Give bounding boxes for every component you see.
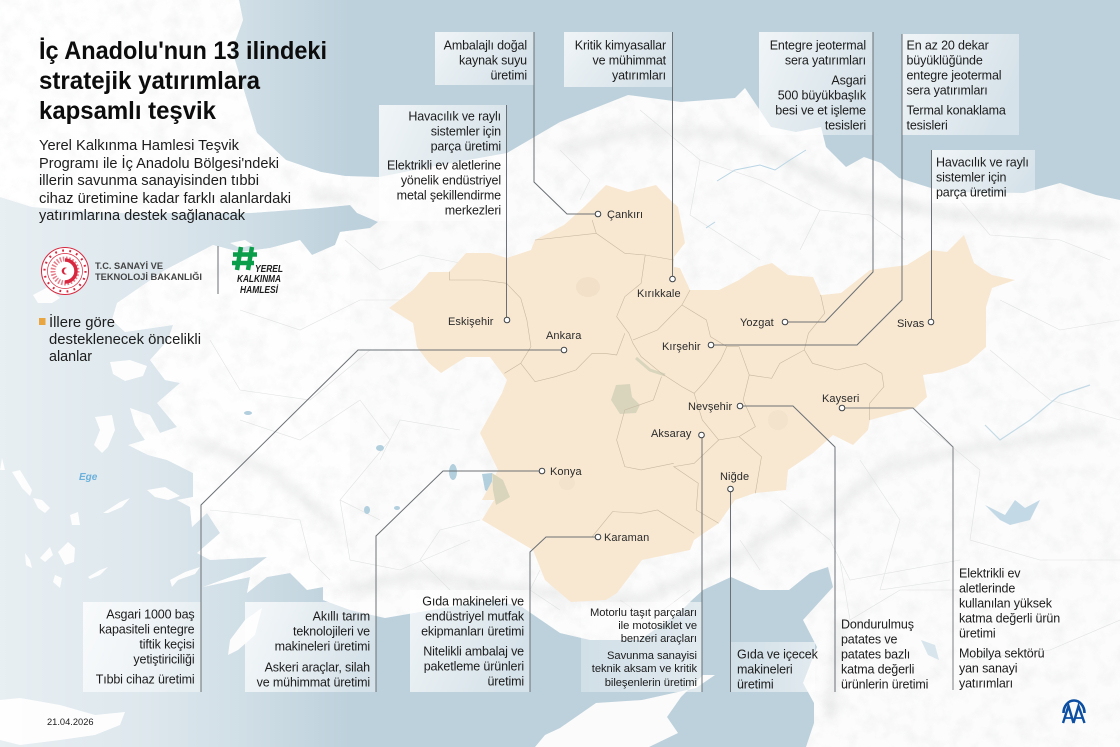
intro text: Programı ile İç Anadolu Bölgesi'ndeki — [39, 154, 279, 172]
city markers and labels: Karaman — [604, 532, 649, 544]
legend: İllere göre — [49, 313, 115, 331]
panel: Kayseri: üretimi — [959, 626, 996, 640]
province borders outside region — [210, 110, 1120, 660]
panel: Nevşehir — [841, 618, 928, 692]
city markers and labels: Yozgat — [740, 317, 774, 329]
city markers and labels: Çankırı — [607, 209, 643, 221]
panel: Yozgat: 500 büyükbaşlık — [778, 88, 867, 102]
left wash — [0, 0, 350, 747]
panel: Konya: ve mühimmat üretimi — [257, 676, 370, 690]
panel: Niğde — [737, 648, 819, 692]
city markers and labels: Ankara — [546, 330, 582, 342]
panel: Yozgat: Asgari — [831, 74, 866, 88]
lakes inside region — [611, 384, 640, 414]
city markers and labels: Sivas — [897, 318, 925, 330]
panel: Yozgat — [770, 38, 867, 132]
city markers and labels: Konya — [550, 466, 582, 478]
panel: Karaman — [421, 594, 525, 688]
left land re-lightening — [282, 163, 350, 602]
logo: T.C. Sanayi ve Teknoloji Bakanlığı: T.C. SANAYİ VE — [95, 261, 163, 272]
panel: Yozgat: tesisleri — [825, 118, 866, 132]
panel: Nevşehir: patates ve — [841, 632, 897, 646]
panel: Ankara — [96, 608, 195, 686]
panel: Sivas: sistemler için — [936, 170, 1006, 184]
panel: Aksaray: Savunma sanayisi — [607, 650, 697, 662]
intro text: yatırımlarına destek sağlanacak — [39, 208, 246, 224]
intro text: cihaz üretimine kadar farklı alanlardaki — [39, 191, 291, 207]
panel: Nevşehir: patates bazlı — [841, 648, 910, 662]
city markers and labels: Aksaray — [651, 428, 692, 440]
panel: Niğde: makineleri — [737, 662, 793, 676]
region: Central Anatolia provinces — [389, 185, 1015, 602]
legend: desteklenecek öncelikli — [49, 332, 201, 348]
lakes and rivers — [244, 150, 1090, 660]
panel: Eskişehir: metal şekillendirme — [397, 188, 501, 202]
panel: Ankara: Asgari 1000 baş — [106, 608, 194, 622]
logo: Yerel Kalkınma Hamlesi: HAMLESİ — [240, 283, 279, 296]
title — [39, 37, 327, 125]
leader lines — [201, 32, 953, 692]
panel: Niğde: üretimi — [737, 678, 774, 692]
panel: Kayseri: Elektrikli ev — [959, 566, 1021, 580]
intro text: Yerel Kalkınma Hamlesi Teşvik — [39, 138, 240, 154]
panel: Ankara: kapasiteli entegre — [99, 622, 195, 636]
panel: Kayseri: katma değerli ürün — [959, 612, 1060, 626]
panel: Yozgat: Entegre jeotermal — [770, 38, 866, 52]
panel: Kırşehir: entegre jeotermal — [906, 68, 1001, 82]
panel: Çankırı: üretimi — [490, 68, 527, 82]
panel: Sivas — [936, 156, 1029, 200]
panel: Karaman: üretimi — [487, 674, 524, 688]
panel: Aksaray: Motorlu taşıt parçaları — [590, 607, 697, 619]
panel: Karaman: endüstriyel mutfak — [425, 610, 525, 624]
panel: Kırşehir: tesisleri — [906, 118, 948, 132]
panel: Konya: makineleri üretimi — [275, 640, 370, 654]
title: İç Anadolu'nun 13 ilindeki — [39, 37, 327, 65]
panel: Karaman: paketleme ürünleri — [424, 660, 524, 674]
panel: Eskişehir: Havacılık ve raylı — [408, 110, 501, 124]
panel: Kırşehir: En az 20 dekar — [906, 38, 989, 52]
panel: Kırşehir: büyüklüğünde — [906, 54, 983, 68]
logo: Yerel Kalkınma Hamlesi — [232, 247, 283, 296]
panel: Niğde: Gıda ve içecek — [737, 648, 819, 662]
panel: Sivas: parça üretimi — [936, 186, 1006, 200]
panel: Yozgat: besi ve et işleme — [775, 104, 866, 118]
logo: Yerel Kalkınma Hamlesi: KALKINMA — [237, 273, 281, 285]
panel: Konya: Akıllı tarım — [313, 610, 370, 624]
panel: Eskişehir: merkezleri — [445, 204, 501, 218]
legend: alanlar — [49, 349, 92, 365]
panels backgrounds — [83, 32, 1035, 692]
panel: Kırşehir — [906, 38, 1006, 132]
panel: Çankırı — [444, 38, 527, 82]
panel: Nevşehir: ürünlerin üretimi — [841, 678, 928, 692]
panel: Kayseri: Mobilya sektörü — [959, 646, 1045, 660]
panel: Yozgat: sera yatırımları — [785, 54, 866, 68]
panel: Kırıkkale — [575, 38, 667, 82]
icon: AA logo — [1063, 700, 1084, 723]
panel: Aksaray: benzeri araçları — [621, 633, 697, 645]
date: 21.04.2026 — [47, 717, 94, 727]
panel: Kırşehir: Termal konaklama — [906, 104, 1006, 118]
panel: Ankara: tiftik keçisi — [139, 638, 194, 652]
panel: Çankırı: kaynak suyu — [459, 54, 527, 68]
city markers and labels: Kırşehir — [662, 341, 701, 353]
city markers and labels: Kırıkkale — [637, 288, 681, 300]
panel: Kırıkkale: yatırımları — [612, 68, 666, 82]
city markers and labels: Nevşehir — [688, 401, 732, 413]
panel: Eskişehir: sistemler için — [431, 124, 501, 138]
province borders — [449, 220, 884, 537]
panel: Kayseri: yan sanayi — [959, 662, 1017, 676]
sea label: Ege: Ege — [79, 472, 98, 483]
title: kapsamlı teşvik — [39, 97, 216, 125]
panel: Aksaray: ile motosiklet ve — [618, 620, 697, 632]
panel: Kırıkkale: Kritik kimyasallar — [575, 38, 666, 52]
panel: Kayseri: aletlerinde — [959, 582, 1015, 596]
panel: Ankara: Tıbbi cihaz üretimi — [96, 672, 194, 686]
city markers and labels: Niğde — [720, 471, 749, 483]
panel: Eskişehir: Elektrikli ev aletlerine — [387, 158, 501, 172]
panel: Karaman: Nitelikli ambalaj ve — [423, 644, 524, 658]
panel: Konya: teknolojileri ve — [293, 624, 370, 638]
panel: Kayseri — [959, 566, 1060, 690]
panel: Eskişehir — [387, 110, 501, 218]
logo: Yerel Kalkınma Hamlesi: YEREL — [255, 263, 283, 275]
panel: Sivas: Havacılık ve raylı — [936, 156, 1029, 170]
title: stratejik yatırımlara — [39, 67, 261, 95]
panel: Konya: Askeri araçlar, silah — [265, 660, 370, 674]
logo: T.C. Sanayi ve Teknoloji Bakanlığı: TEKNOLOJİ BAKANLIĞI — [95, 271, 202, 283]
panel: Eskişehir: yönelik endüstriyel — [401, 174, 501, 188]
intro text: illerin savunma sanayisinden tıbbi — [39, 173, 259, 189]
legend — [39, 313, 201, 365]
intro text — [39, 138, 291, 224]
panel: Aksaray — [590, 607, 697, 689]
panel: Çankırı: Ambalajlı doğal — [444, 38, 527, 52]
logo: T.C. Sanayi ve Teknoloji Bakanlığı — [42, 248, 202, 294]
city markers and labels — [448, 209, 934, 544]
city markers and labels: Kayseri — [822, 393, 859, 405]
panel: Aksaray: bileşenlerin üretimi — [605, 677, 697, 689]
panel: Kırıkkale: ve mühimmat — [593, 54, 667, 68]
panel: Eskişehir: parça üretimi — [431, 140, 501, 154]
panel: Karaman: ekipmanları üretimi — [421, 624, 524, 638]
panel: Kırşehir: sera yatırımları — [906, 84, 988, 98]
panel: Nevşehir: Dondurulmuş — [841, 618, 914, 632]
panel: Nevşehir: katma değerli — [841, 662, 914, 676]
panel: Karaman: Gıda makineleri ve — [422, 594, 524, 608]
terrain shading — [174, 20, 1113, 718]
panel: Kayseri: yatırımları — [959, 676, 1013, 690]
panel: Aksaray: teknik aksam ve kritik — [592, 663, 697, 675]
city markers and labels: Eskişehir — [448, 316, 494, 328]
panel: Ankara: yetiştiriciliği — [133, 652, 194, 666]
panel: Konya — [257, 610, 370, 690]
islands — [0, 240, 715, 747]
panel: Kayseri: kullanılan yüksek — [959, 596, 1053, 610]
